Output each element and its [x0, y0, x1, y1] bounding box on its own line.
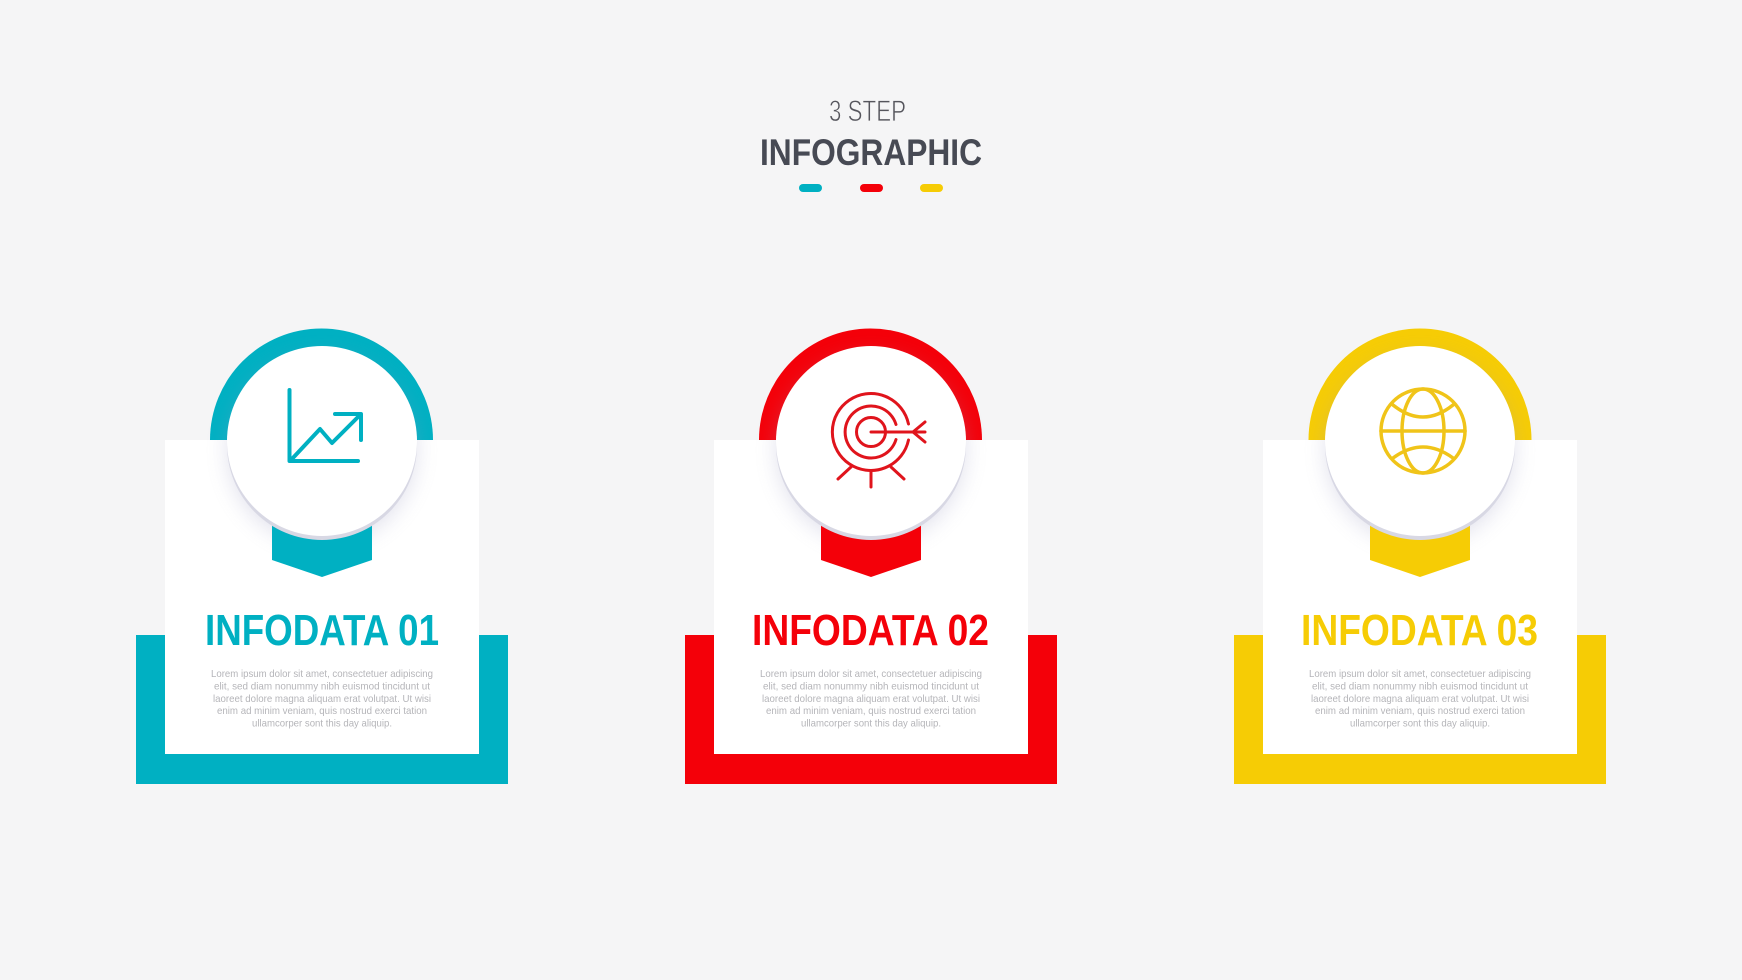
- white card: [1263, 440, 1577, 754]
- ring arc: [759, 328, 982, 440]
- title: 3 step: 3 STEP: [829, 95, 906, 128]
- body text: laoreet dolore magna aliquam erat volutpat. Ut wisi: [1311, 693, 1529, 705]
- body text: laoreet dolore magna aliquam erat volutpat. Ut wisi: [762, 693, 980, 705]
- heading: INFODATA 02: [752, 606, 989, 655]
- title: infographic: INFOGRAPHIC: [760, 132, 982, 173]
- title: [760, 95, 982, 192]
- body text: enim ad minim veniam, quis nostrud exerci tation: [217, 705, 427, 717]
- circle badge: [1325, 346, 1515, 540]
- body text: [760, 668, 982, 730]
- icon: growth chart: [290, 390, 361, 461]
- panel: infodata 02: [685, 328, 1057, 784]
- badge shadow: [777, 356, 965, 544]
- body text: ullamcorper sont this day aliquip.: [1350, 718, 1490, 730]
- ring arc: [210, 328, 433, 440]
- body text: ullamcorper sont this day aliquip.: [252, 718, 392, 730]
- panel: infodata 03: [1234, 328, 1606, 784]
- pennant: [821, 500, 921, 577]
- body text: laoreet dolore magna aliquam erat volutpat. Ut wisi: [213, 693, 431, 705]
- icon: target with arrow: [832, 394, 925, 487]
- body text: Lorem ipsum dolor sit amet, consectetuer adipiscing: [211, 668, 433, 680]
- circle badge: [776, 346, 966, 540]
- white card: [165, 440, 479, 754]
- pennant: [1370, 500, 1470, 577]
- bracket frame: [1234, 635, 1606, 784]
- ring arc: [1308, 328, 1532, 440]
- body text: enim ad minim veniam, quis nostrud exerci tation: [766, 705, 976, 717]
- badge shadow: [228, 356, 416, 544]
- bracket frame: [136, 635, 508, 784]
- body text: elit, sed diam nonummy nibh euismod tincidunt ut: [763, 680, 979, 692]
- bracket frame: [685, 635, 1057, 784]
- body text: elit, sed diam nonummy nibh euismod tincidunt ut: [214, 680, 430, 692]
- body text: elit, sed diam nonummy nibh euismod tincidunt ut: [1312, 680, 1528, 692]
- circle badge: [227, 346, 417, 540]
- heading: INFODATA 03: [1301, 606, 1538, 655]
- badge shadow: [1326, 356, 1514, 544]
- body text: Lorem ipsum dolor sit amet, consectetuer adipiscing: [1309, 668, 1531, 680]
- body text: enim ad minim veniam, quis nostrud exerci tation: [1315, 705, 1525, 717]
- icon: globe: [1381, 389, 1465, 473]
- pennant: [272, 500, 372, 577]
- colour dashes: [799, 184, 943, 192]
- body text: [1309, 668, 1531, 730]
- panel: infodata 01: [136, 328, 508, 784]
- white card: [714, 440, 1028, 754]
- body text: [211, 668, 433, 730]
- body text: Lorem ipsum dolor sit amet, consectetuer adipiscing: [760, 668, 982, 680]
- heading: INFODATA 01: [205, 606, 439, 655]
- body text: ullamcorper sont this day aliquip.: [801, 718, 941, 730]
